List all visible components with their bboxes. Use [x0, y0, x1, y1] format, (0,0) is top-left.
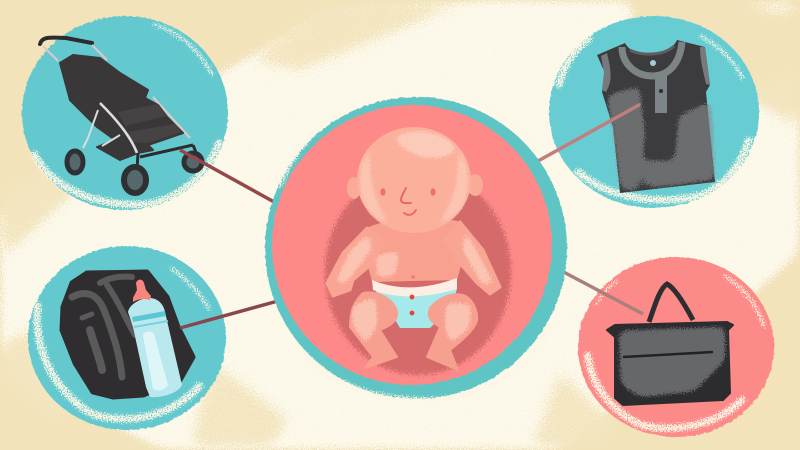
circle speckled rim — [37, 266, 211, 419]
icon: baby bottle — [128, 280, 182, 397]
icon: baby — [327, 127, 500, 370]
diaper — [372, 278, 457, 328]
panel: baby circle — [265, 97, 567, 399]
bag speckle shading — [618, 326, 726, 398]
line: backpack to baby — [180, 301, 278, 328]
right leg — [427, 294, 477, 370]
icon: backpack — [62, 272, 193, 397]
baby shadow — [324, 168, 512, 376]
panel: stroller circle — [22, 16, 228, 210]
icon: tote bag — [607, 284, 733, 405]
head — [357, 127, 471, 233]
icon: sleeveless shirt — [597, 40, 716, 193]
panel: bag circle — [578, 257, 774, 437]
line: bag to baby — [556, 268, 643, 314]
line: stroller to baby — [180, 150, 285, 208]
leg highlights — [352, 296, 472, 345]
circle speckled rim — [558, 34, 750, 200]
panel: backpack and bottle circle — [28, 246, 226, 430]
circle speckled rim — [278, 100, 555, 399]
ears — [347, 174, 483, 199]
panel: shirt circle — [549, 16, 759, 208]
circle speckled rim — [32, 24, 221, 205]
shirt speckle shading — [606, 85, 716, 192]
left leg — [350, 292, 397, 368]
line: shirt to baby — [538, 105, 639, 161]
circle speckled rim — [587, 274, 765, 428]
baby torso and arms — [327, 218, 500, 296]
icon: stroller — [40, 38, 202, 193]
